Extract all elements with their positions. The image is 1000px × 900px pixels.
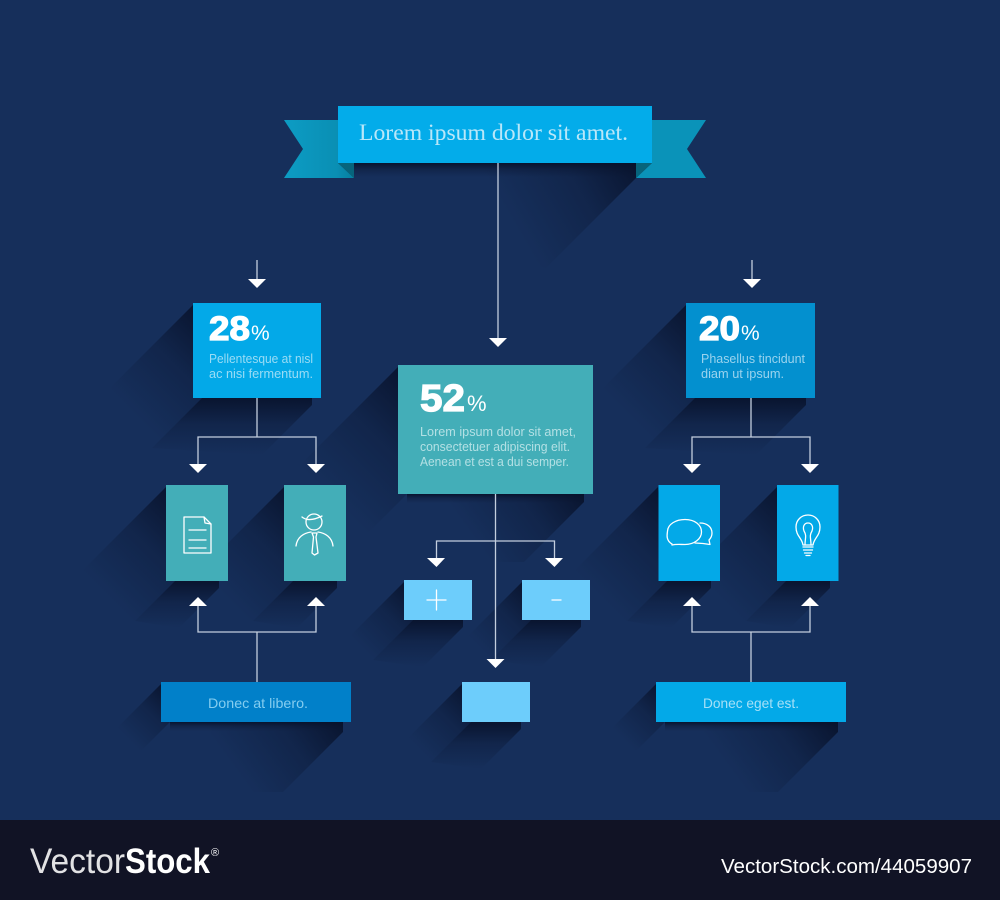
panel: plus (404, 580, 472, 620)
value 28%: 28 (209, 310, 250, 348)
description 52%: Lorem ipsum dolor sit amet, (420, 425, 576, 439)
left connectors up (189, 597, 325, 682)
watermark logo: VectorStock (30, 842, 210, 881)
long shadows (81, 163, 838, 792)
value 20%: % (741, 322, 760, 345)
icon: person (296, 514, 333, 555)
label: Donec at libero. (208, 695, 308, 711)
panel: idea (777, 485, 838, 581)
description 20%: Phasellus tincidunt (701, 352, 806, 366)
right connectors down (683, 398, 819, 473)
left connectors down (189, 398, 325, 473)
registered mark: ® (211, 847, 219, 859)
icon: minus (552, 599, 561, 601)
panel: chat (658, 485, 720, 581)
ribbon left tail (284, 120, 354, 178)
panel: 20% (686, 303, 815, 398)
value 28%: % (251, 322, 270, 345)
icon: chat bubbles (667, 520, 712, 545)
panel: empty result (462, 682, 530, 722)
panel: person (284, 485, 346, 581)
panel: 52% (398, 365, 593, 494)
right connectors up (683, 597, 819, 682)
panel: 28% (193, 303, 321, 398)
left column arrow in (248, 260, 266, 288)
connector: banner to center (489, 163, 507, 347)
icon: plus (427, 590, 446, 610)
ribbon right tail (636, 120, 706, 178)
ribbon banner (284, 106, 706, 178)
icon: document (184, 517, 211, 553)
panel: minus (522, 580, 590, 620)
right column arrow in (743, 260, 761, 288)
title: Lorem ipsum dolor sit amet. (359, 120, 628, 145)
value 52%: % (467, 391, 487, 416)
description 28%: Pellentesque at nisl (209, 352, 313, 366)
footer bar (0, 820, 1000, 900)
icon: light bulb (796, 515, 820, 556)
description 20%: diam ut ipsum. (701, 367, 784, 381)
description 52%: consectetuer adipiscing elit. (420, 440, 570, 454)
description 52%: Aenean et est a dui semper. (420, 455, 569, 469)
value 52%: 52 (420, 378, 465, 420)
panel: Donec eget est (656, 682, 846, 722)
watermark id: VectorStock.com/44059907 (721, 856, 972, 878)
value 20%: 20 (699, 310, 740, 348)
panel: Donec at libero (161, 682, 351, 722)
description 28%: ac nisi fermentum. (209, 367, 313, 381)
ribbon right fold (636, 163, 652, 178)
center connectors (427, 494, 563, 668)
label: Donec eget est. (703, 695, 799, 711)
panel: document (166, 485, 228, 581)
ribbon left fold (338, 163, 354, 178)
ribbon face (338, 106, 652, 163)
